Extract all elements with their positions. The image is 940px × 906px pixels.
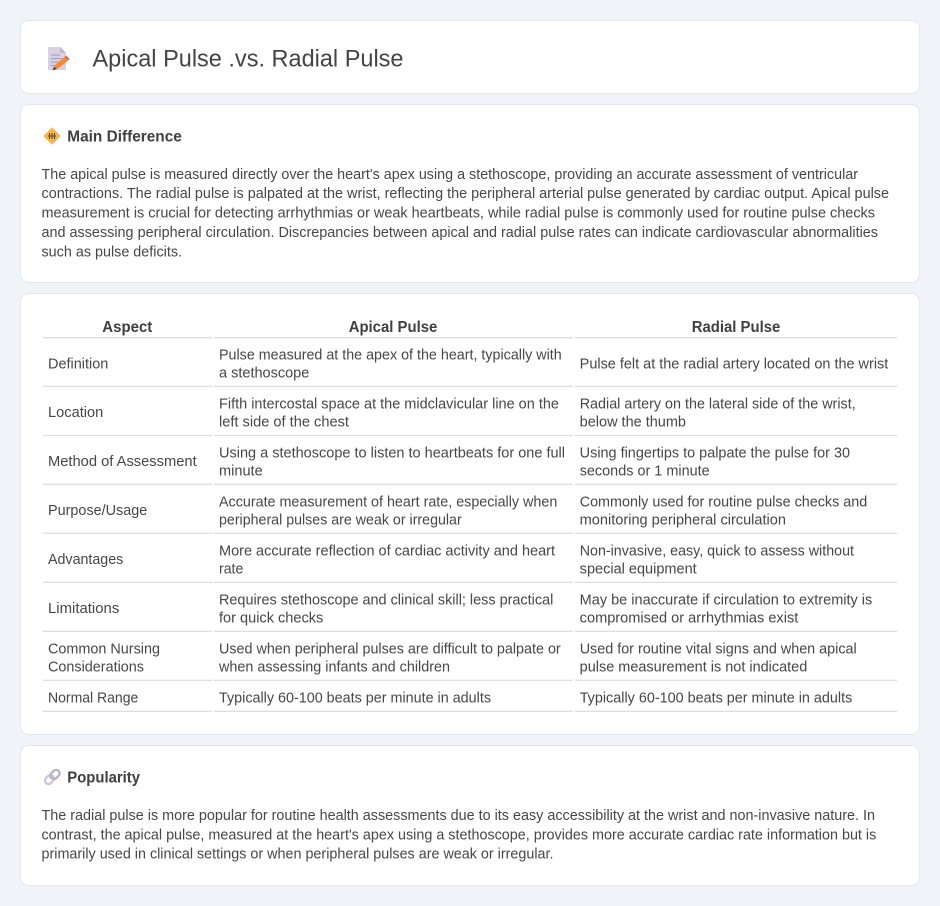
icon: document with pencil [48,47,70,70]
table row: common nursing considerations: Used for routine vital signs and when apical [580,641,857,657]
table header row: Radial Pulse [692,319,780,336]
heading: main difference: Main Difference [67,129,182,146]
text block: popularity paragraph: The radial pulse is more popular for routine health assessments due to its easy accessibility at the wrist and non-invasive nature. In [42,808,875,824]
table row: limitations: May be inaccurate if circulation to extremity is [580,592,872,608]
panel: popularity [20,746,920,886]
table row: normal range: Typically 60-100 beats per minute in adults [219,690,491,706]
table row: normal range [43,690,897,711]
table row: advantages: Advantages [48,552,123,568]
title: Apical Pulse .vs. Radial Pulse [92,46,404,72]
table row: limitations [43,592,897,631]
table row: purpose and usage [43,494,897,533]
table row: purpose and usage: Purpose/Usage [48,503,147,519]
table row: common nursing considerations [43,641,897,680]
table row: normal range: Typically 60-100 beats per minute in adults [580,690,852,706]
table row: limitations: for quick checks [219,610,323,626]
text block: popularity paragraph: primarily used in clinical settings or when peripheral pulses are weak or irregular. [42,846,554,862]
table row: location [43,396,897,436]
table row: location: left side of the chest [219,414,349,430]
table row: definition: Pulse felt at the radial artery located on the wrist [580,356,888,372]
table row: purpose and usage: monitoring peripheral circulation [580,512,786,528]
table row: location: Location [48,405,103,421]
table row: purpose and usage: Commonly used for routine pulse checks and [580,494,867,510]
text block: main difference paragraph [42,167,889,260]
table row: advantages: Non-invasive, easy, quick to assess without [580,543,854,559]
table header row [43,319,897,338]
table row: definition: a stethoscope [219,365,309,381]
panel: title card [20,20,920,94]
table row: common nursing considerations: pulse measurement is not indicated [580,659,807,675]
table header row: Aspect [102,319,153,336]
table row: method of assessment: Method of Assessment [48,454,197,470]
table row: purpose and usage: peripheral pulses are weak or irregular [219,512,462,528]
heading: popularity: Popularity [67,770,140,787]
table row: common nursing considerations: Common Nursing [48,641,160,657]
table row: advantages: special equipment [580,561,697,577]
text block: main difference paragraph: The apical pulse is measured directly over the heart's apex using a stethoscope, providing an accurate assessment of ventricular [42,167,858,183]
table header row: Apical Pulse [349,319,437,336]
table row: method of assessment: seconds or 1 minute [580,463,710,479]
text block: popularity paragraph: contrast, the apical pulse, measured at the heart's apex using a stethoscope, provides more accurate cardiac rate information but is [42,827,876,843]
table row: common nursing considerations: Considerations [48,659,144,675]
table row: method of assessment: Using fingertips to palpate the pulse for 30 [580,446,850,462]
table row: purpose and usage: Accurate measurement of heart rate, especially when [219,494,557,510]
table row: method of assessment: Using a stethoscope to listen to heartbeats for one full [219,446,565,462]
table row: method of assessment: minute [219,463,263,479]
icon: orange diamond sign [44,128,60,144]
table row: location: Radial artery on the lateral side of the wrist, [580,396,856,412]
table row: advantages: rate [219,561,243,577]
table row: definition: Definition [48,356,108,372]
table row: method of assessment [43,446,897,484]
table row: definition: Pulse measured at the apex of the heart, typically with [219,347,562,363]
table row: location: below the thumb [580,414,686,430]
table row: definition [43,347,897,386]
table row: advantages [43,543,897,582]
text block: main difference paragraph: and assessing peripheral circulation. Discrepancies between apical and radial pulse rates can indicate cardiovascular abnormalities [42,225,878,241]
icon: chain link [43,768,61,786]
table row: location: Fifth intercostal space at the midclavicular line on the [219,396,559,412]
table row: common nursing considerations: when assessing infants and children [218,659,450,675]
table row: limitations: compromised or arrhythmias exist [580,610,798,626]
text block: main difference paragraph: measurement is crucial for detecting arrhythmias or weak heartbeats, while radial pulse is commonly used for routine pulse checks [42,206,875,222]
text block: popularity paragraph [42,808,876,862]
text block: main difference paragraph: such as pulse deficits. [42,244,182,260]
table row: limitations: Requires stethoscope and clinical skill; less practical [219,592,553,608]
panel: comparison table [20,294,920,734]
table row: normal range: Normal Range [48,690,138,706]
text block: main difference paragraph: contractions. The radial pulse is palpated at the wrist, reflecting the peripheral arterial pulse generated by cardiac output. Apical pulse [42,186,889,202]
table row: limitations: Limitations [48,601,119,617]
panel: main difference [20,104,920,282]
table row: advantages: More accurate reflection of cardiac activity and heart [219,543,555,559]
table row: common nursing considerations: Used when peripheral pulses are difficult to palpate or [219,641,561,657]
